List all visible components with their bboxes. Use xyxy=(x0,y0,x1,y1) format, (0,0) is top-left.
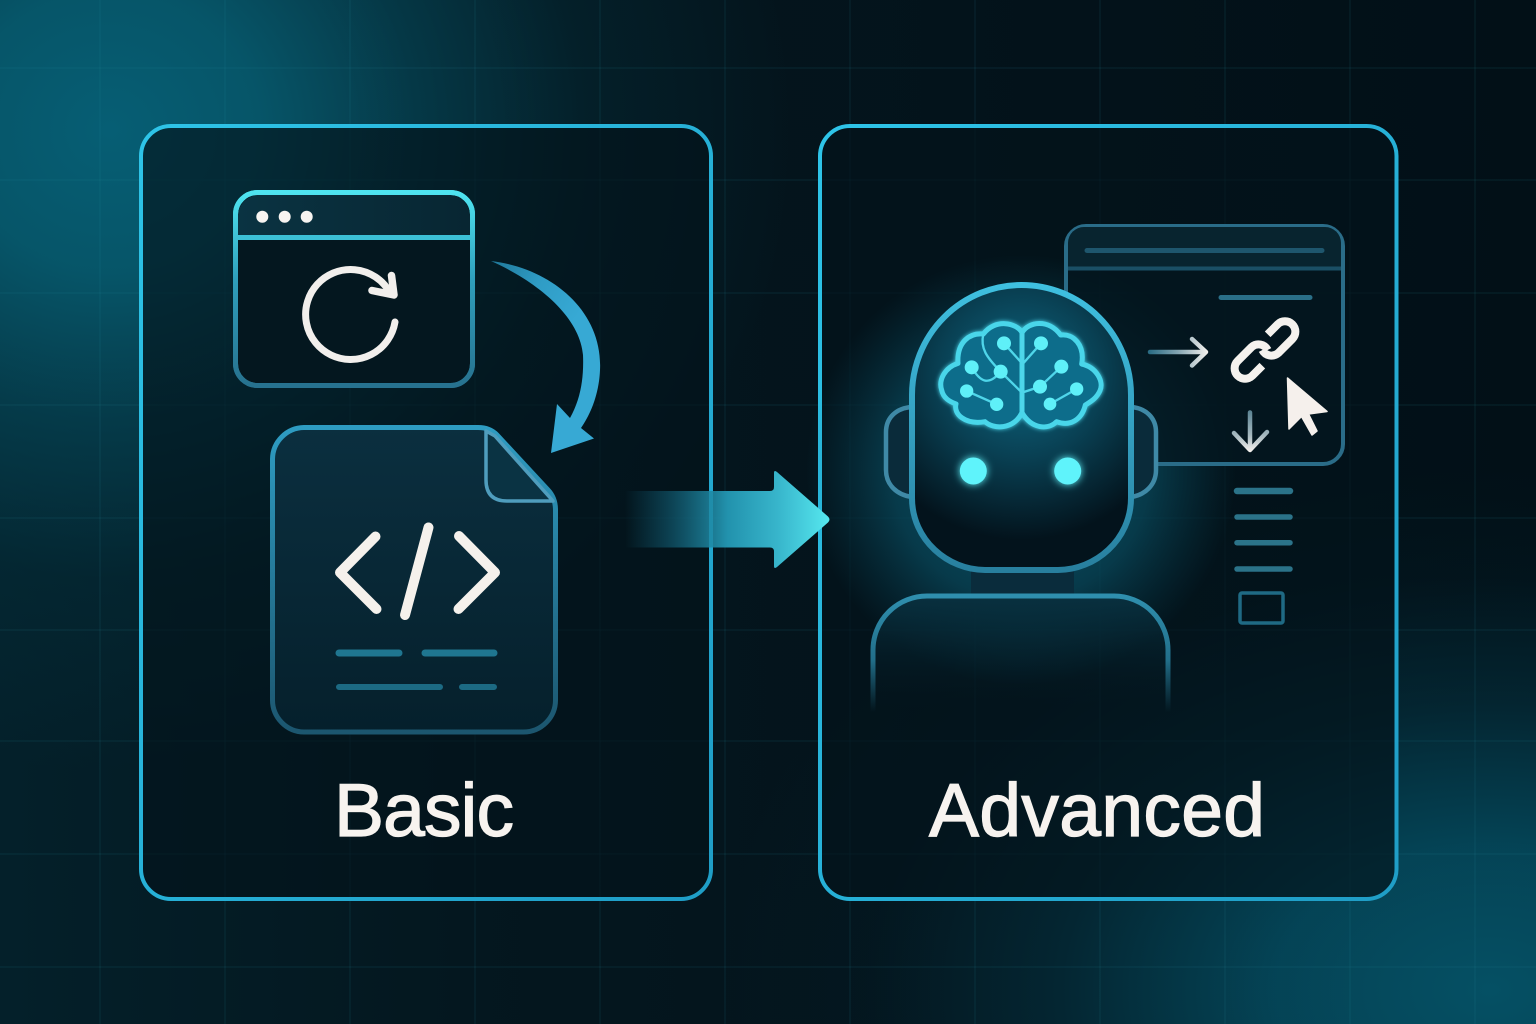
heading: basic: Basic xyxy=(334,768,514,852)
robot ears xyxy=(886,407,1156,497)
arrow: basic to advanced xyxy=(625,471,830,568)
heading: advanced: Advanced xyxy=(929,768,1265,852)
robot shoulders xyxy=(873,596,1168,715)
panel: basic xyxy=(141,126,711,899)
icon: chain link xyxy=(1235,321,1295,379)
icon: brain circuit xyxy=(941,323,1101,427)
icon: robot xyxy=(873,285,1168,715)
icon: glow behind robot xyxy=(806,255,1236,685)
icon: curved arrow xyxy=(491,261,600,453)
robot head xyxy=(912,285,1131,570)
icon: page list lines xyxy=(1237,491,1290,623)
icon: code file xyxy=(272,428,556,732)
robot neck xyxy=(971,566,1074,596)
icon: right arrow xyxy=(1150,339,1206,366)
icon: browser window with reload xyxy=(236,192,472,386)
icon: down arrow xyxy=(1234,412,1267,450)
robot eyes xyxy=(960,458,1081,484)
panel: advanced xyxy=(806,126,1396,899)
icon: cursor xyxy=(1288,378,1327,435)
panel: web page behind robot xyxy=(1066,226,1343,464)
